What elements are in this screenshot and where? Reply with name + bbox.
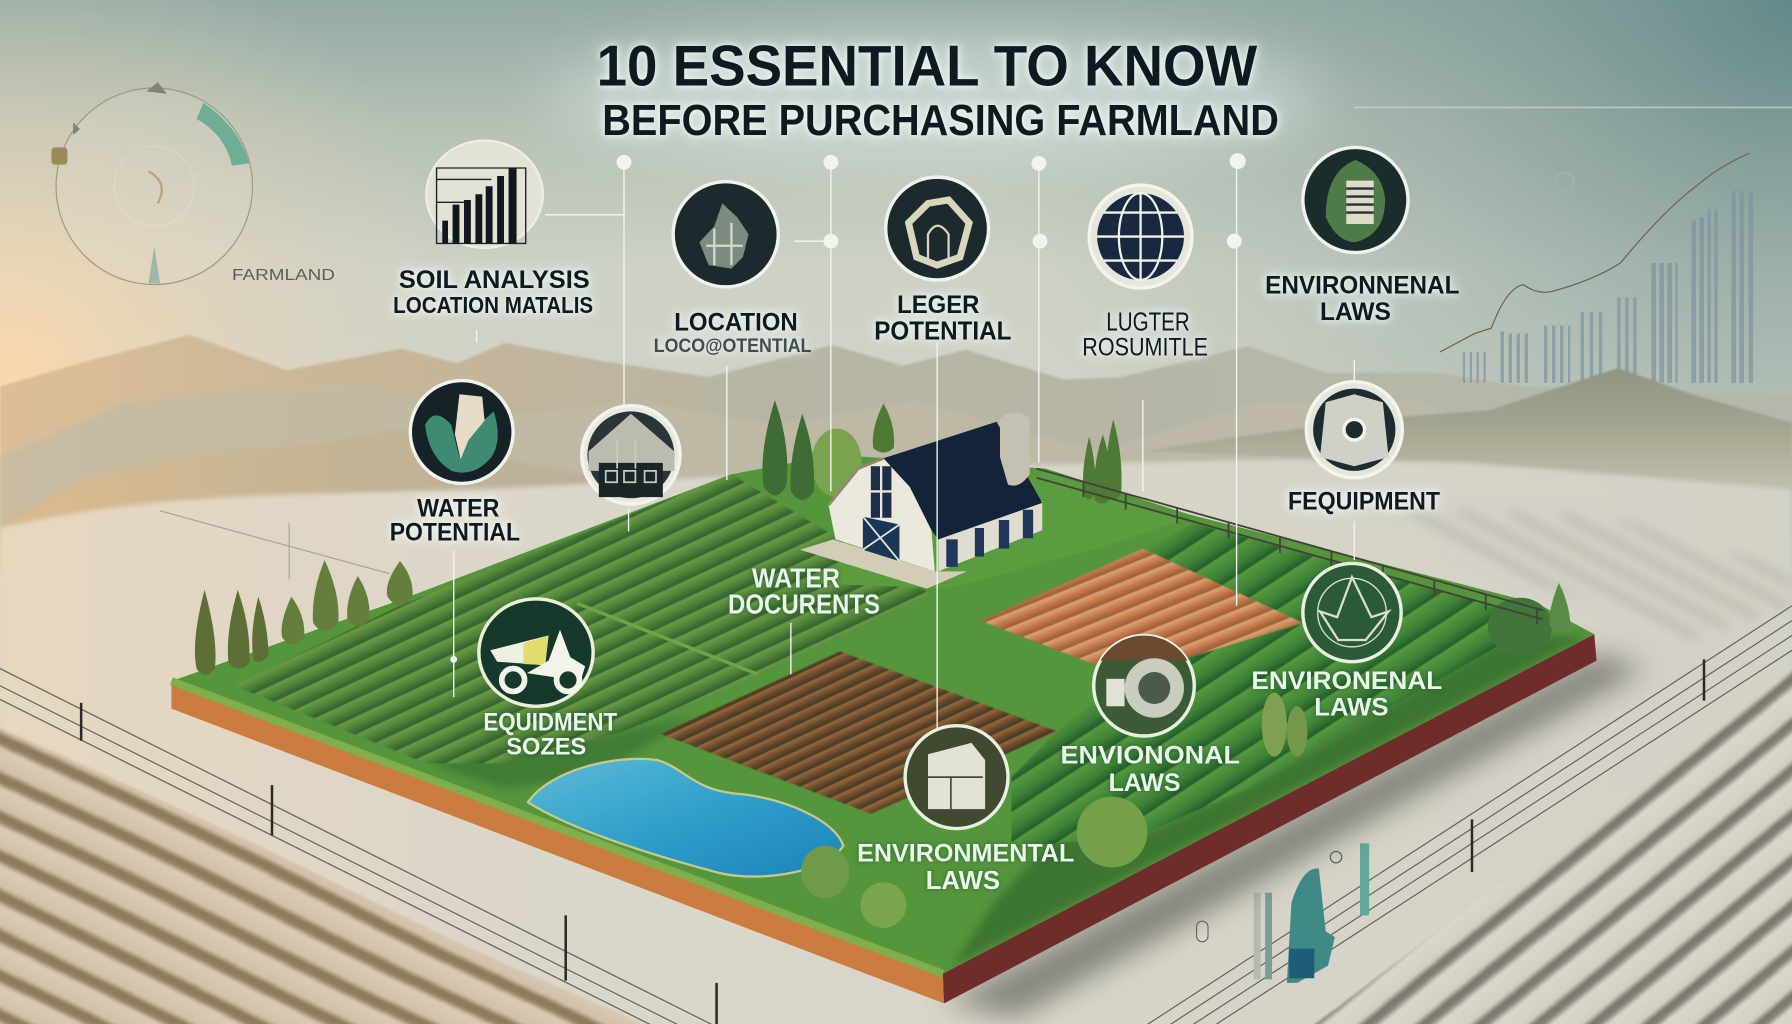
icon: water — [410, 381, 513, 483]
striped field: bottom right — [1314, 646, 1792, 1024]
icon: environmental wheel — [1094, 635, 1194, 736]
label: lugter rosumitle: LUGTER — [1106, 306, 1190, 336]
icon: environmental compass — [1303, 563, 1401, 662]
soil edge: front left — [171, 681, 944, 1003]
icon: globe — [1089, 185, 1192, 288]
right hills — [1143, 368, 1792, 489]
icon: soil analysis bar chart — [426, 141, 543, 248]
barn window — [871, 466, 891, 518]
icon: equipment gear — [1306, 382, 1402, 478]
soil edge: front right — [943, 634, 1597, 1003]
label: water potential: POTENTIAL — [390, 519, 520, 547]
trend line — [1440, 153, 1750, 352]
label: water potential — [390, 495, 520, 547]
label: equipment: FEQUIPMENT — [1288, 488, 1441, 516]
label: water potential: WATER — [417, 495, 499, 523]
label: leger potential — [874, 291, 1011, 345]
label: location potential: LOCO@OTENTIAL — [654, 335, 812, 357]
crop rows: left green field — [234, 474, 931, 763]
orange crop field — [981, 549, 1303, 677]
connector lines and dots — [450, 153, 1354, 731]
silo — [1000, 413, 1030, 486]
concrete apron — [800, 539, 967, 589]
striped field: upper right — [1360, 509, 1792, 640]
label: environmental laws (top) — [1265, 272, 1459, 326]
label: leger potential: LEGER — [897, 291, 979, 319]
icon: environmental document — [1303, 147, 1408, 253]
brown crop field — [661, 651, 1057, 814]
label: equipment sizes: SOZES — [506, 733, 586, 760]
label: environmental laws (right) — [1251, 667, 1442, 721]
icon: environmental building — [905, 726, 1008, 829]
icon: location — [673, 182, 778, 287]
ground lines — [160, 511, 390, 579]
barn — [800, 413, 1042, 589]
label: soil analysis: LOCATION MATALIS — [393, 292, 593, 318]
label: soil analysis — [393, 266, 593, 318]
label: environmental laws (top): ENVIRONNENAL — [1265, 272, 1459, 300]
crop rows: right green field — [1011, 523, 1509, 848]
label: water documents — [728, 562, 880, 620]
light path across field — [577, 603, 758, 674]
icon: leger — [886, 177, 989, 280]
ground plain — [0, 459, 1792, 1024]
back fence — [1037, 469, 1543, 624]
shadow of land block — [944, 654, 1646, 1017]
dark foreground grass — [952, 635, 1589, 967]
label: environmental laws (bottom): ENVIRONMENTAL — [857, 840, 1074, 868]
trees: left row — [195, 560, 413, 675]
distant mountains — [0, 335, 1792, 571]
label: water documents: DOCURENTS — [728, 589, 880, 620]
icon: truck — [479, 599, 593, 706]
decorative bar chart — [1463, 191, 1753, 383]
label: environmental laws (center): LAWS — [1109, 769, 1181, 797]
deco circle and sky line — [1354, 107, 1792, 191]
label: water documents: WATER — [752, 562, 840, 593]
label: leger potential: POTENTIAL — [874, 315, 1011, 345]
label: environmental laws (top): LAWS — [1320, 298, 1391, 326]
striped field: bottom left — [0, 728, 640, 1024]
label: environmental laws (bottom) — [857, 840, 1074, 895]
label: soil analysis: SOIL ANALYSIS — [399, 266, 590, 294]
label: location potential — [654, 308, 812, 357]
label: environmental laws (right): ENVIRONENAL — [1251, 667, 1442, 695]
title — [597, 35, 1279, 145]
label: lugter rosumitle: ROSUMITLE — [1082, 333, 1208, 361]
barn door — [863, 517, 899, 561]
decorative ring chart — [51, 82, 253, 285]
label: environmental laws (right): LAWS — [1314, 693, 1389, 721]
barn side wall — [938, 501, 1042, 571]
farmland block — [171, 455, 1597, 1003]
title: 10 ESSENTIAL TO KNOW — [597, 35, 1257, 99]
trees: behind barn — [762, 400, 1122, 504]
trees: right and foreground — [801, 583, 1570, 928]
grass strip along soil edge — [171, 681, 943, 974]
label: equipment sizes — [483, 708, 618, 760]
label: environmental laws (bottom): LAWS — [926, 865, 1000, 895]
pond — [528, 759, 843, 877]
barn gable wall — [829, 458, 935, 571]
label: equipment sizes: EQUIDMENT — [483, 708, 618, 736]
barn roof — [883, 422, 1042, 539]
deco label: farmland: FARMLAND — [232, 267, 335, 284]
label: location potential: LOCATION — [674, 308, 798, 336]
wire fence: right — [1143, 606, 1792, 1024]
title: BEFORE PURCHASING FARMLAND — [602, 97, 1279, 145]
grass surface — [171, 455, 1594, 974]
shaded grass under left field — [426, 714, 697, 789]
icon: building — [582, 406, 680, 504]
label: environmental laws (center) — [1061, 741, 1240, 797]
label: lugter rosumitle — [1082, 306, 1208, 361]
decorative teal bars on ground — [1197, 843, 1369, 983]
lawn around barn — [800, 471, 1183, 589]
wire fence: left — [0, 669, 731, 1024]
label: environmental laws (center): ENVIONONAL — [1061, 741, 1240, 769]
